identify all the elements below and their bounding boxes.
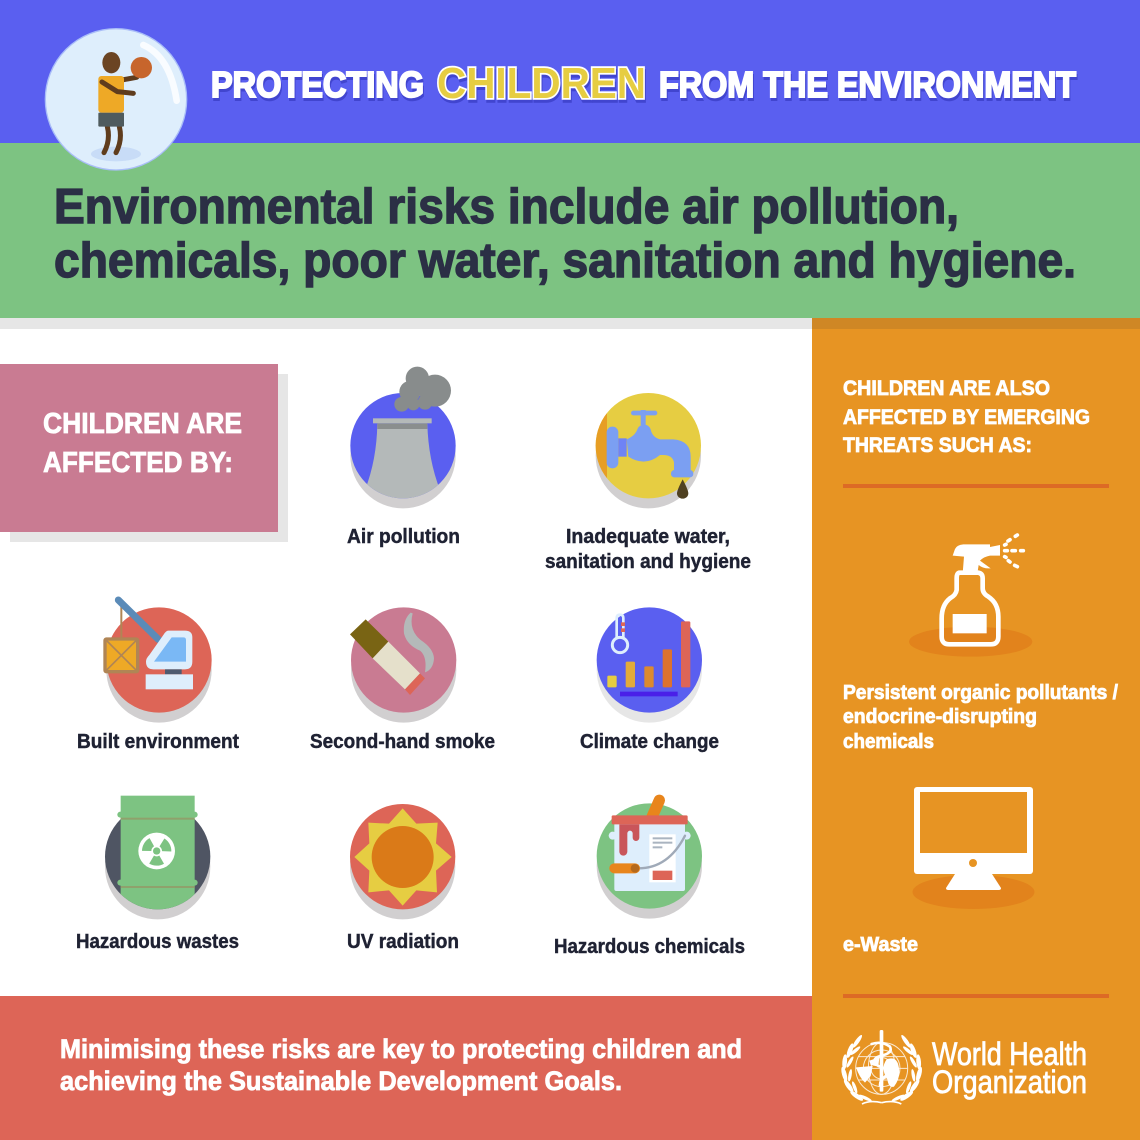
- title: [211, 59, 1076, 108]
- logo text: World Health Organization: [932, 1036, 1087, 1100]
- icon: computer monitor: [912, 787, 1034, 909]
- heading: emerging threats: [843, 377, 1090, 457]
- panel: children are affected by: [0, 364, 288, 542]
- subtitle: Environmental risks include air pollution,: [54, 180, 959, 234]
- logo: World Health Organization emblem: [840, 1030, 923, 1104]
- label: persistent organic pollutants: [843, 682, 1118, 753]
- label: e-Waste: e-Waste: [843, 934, 918, 956]
- footer panel: red: Minimising these risks are key to protecting children and: [60, 1034, 742, 1064]
- label: persistent organic pollutants: Persistent organic pollutants /: [843, 682, 1118, 704]
- label: built environment: Built environment: [77, 731, 239, 753]
- icon: air pollution: [350, 367, 456, 508]
- icon: hazardous chemicals paint bucket: [597, 800, 702, 919]
- label: hazardous chemicals: Hazardous chemicals: [554, 936, 745, 958]
- panel: children are affected by: AFFECTED BY:: [43, 447, 233, 479]
- panel: emerging threats background: [812, 318, 1140, 1140]
- label: climate change: Climate change: [580, 731, 719, 753]
- logo text: World Health Organization: Organization: [932, 1064, 1087, 1100]
- icon: child with ball inside bubble: [45, 29, 187, 170]
- icon: spray bottle: [909, 535, 1032, 657]
- title: CHILDREN: [437, 59, 646, 108]
- subtitle: chemicals, poor water, sanitation and hygiene.: [54, 234, 1076, 288]
- label: air pollution: Air pollution: [347, 526, 460, 548]
- label: persistent organic pollutants: chemicals: [843, 731, 934, 753]
- grey strip under subtitle: [0, 318, 812, 329]
- icon: hazardous wastes barrel: [105, 796, 210, 919]
- icon: water tap: [593, 390, 701, 508]
- heading: emerging threats: CHILDREN ARE ALSO: [843, 377, 1050, 400]
- icon: climate change: [597, 607, 702, 723]
- subtitle: [54, 180, 1076, 288]
- title: FROM THE ENVIRONMENT: [659, 64, 1076, 105]
- icon: UV radiation sun: [350, 804, 455, 919]
- logo text: World Health Organization: World Health: [932, 1036, 1087, 1072]
- title: PROTECTING: [211, 64, 424, 105]
- subtitle band: green: [0, 143, 1140, 318]
- footer panel: red: achieving the Sustainable Development Goals.: [60, 1066, 622, 1096]
- label: persistent organic pollutants: endocrine-disrupting: [843, 706, 1037, 728]
- label: inadequate water, sanitation and hygiene: Inadequate water,: [566, 526, 730, 548]
- heading: emerging threats: THREATS SUCH AS:: [843, 434, 1032, 457]
- label: second-hand smoke: Second-hand smoke: [310, 731, 495, 753]
- label: inadequate water, sanitation and hygiene: [545, 526, 751, 573]
- panel: children are affected by: CHILDREN ARE: [43, 408, 242, 440]
- header band: blue: [0, 0, 1140, 143]
- label: inadequate water, sanitation and hygiene: sanitation and hygiene: [545, 551, 751, 573]
- label: UV radiation: UV radiation: [347, 931, 459, 953]
- footer panel: red: [0, 996, 812, 1140]
- icon: second-hand smoke: [350, 607, 456, 723]
- label: hazardous wastes: Hazardous wastes: [76, 931, 239, 953]
- icon: built environment: [105, 600, 212, 723]
- heading: emerging threats: AFFECTED BY EMERGING: [843, 406, 1090, 429]
